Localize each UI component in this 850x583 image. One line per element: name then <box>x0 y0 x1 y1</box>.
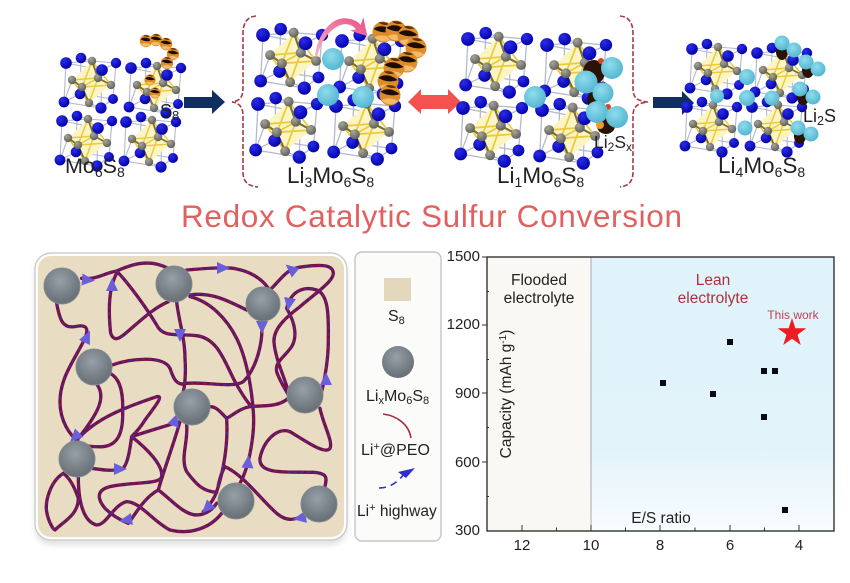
y axis numbers: 1500 <box>447 248 480 265</box>
panel: Li4Mo6S8 crystal: 8 <box>797 164 805 180</box>
legend: S8 label: 8 <box>399 315 405 327</box>
legend: Li+@PEO label: + <box>373 441 380 453</box>
legend: S8 label: S <box>388 308 399 325</box>
polymer chains with Li+ highway <box>46 263 333 532</box>
panel: Li3Mo6S8 crystal: Li <box>287 163 305 188</box>
panel: Li3Mo6S8 crystal: S <box>351 163 366 188</box>
panel: Mo6S8 crystal with S8: S <box>160 101 172 121</box>
panel: Li4Mo6S8 crystal: Li <box>718 153 736 178</box>
panel: Li4Mo6S8 crystal: 6 <box>775 164 783 180</box>
panel: legend <box>355 252 441 541</box>
x axis numbers: 10 <box>583 537 599 554</box>
flooded label: Flooded <box>511 272 567 289</box>
title: Redox Catalytic Sulfur Conversion <box>181 198 682 234</box>
panel: Li1Mo6S8 crystal: Mo <box>522 163 554 188</box>
panel: Li4Mo6S8 crystal <box>680 36 836 180</box>
legend: PEO chain <box>383 414 411 438</box>
x axis title: E/S ratio <box>631 510 691 527</box>
panel: Mo6S8 crystal with S8: 8 <box>172 108 179 123</box>
lean label: electrolyte <box>678 290 748 307</box>
y axis numbers: 900 <box>455 385 480 402</box>
legend: Li+ highway label: highway <box>376 503 437 520</box>
legend: LixMo6S8 label: Li <box>366 388 378 405</box>
legend: LixMo6S8 label: Mo <box>384 388 406 405</box>
legend: S8 swatch <box>384 278 411 301</box>
x axis numbers: 12 <box>514 537 530 554</box>
panel: Mo6S8 crystal with S8: Mo <box>65 154 95 178</box>
y axis title: ) <box>498 330 515 335</box>
panel: Li4Mo6S8 crystal: S <box>824 106 836 126</box>
panel: Li1Mo6S8 crystal: S <box>614 132 626 152</box>
panel: Li1Mo6S8 crystal: Li <box>594 132 608 152</box>
bracket: left <box>232 16 258 187</box>
legend: LixMo6S8 particle <box>382 346 414 378</box>
Li+ direction arrowheads <box>66 260 332 527</box>
panel: Mo6S8 crystal with S8: 8 <box>117 164 125 180</box>
legend: LixMo6S8 label: 6 <box>406 395 412 407</box>
panel: Li3Mo6S8 crystal: Mo <box>312 163 344 188</box>
lean label: Lean <box>696 272 730 289</box>
y axis title: Capacity (mAh g <box>498 344 515 458</box>
panel: Li1Mo6S8 crystal: Li <box>497 163 515 188</box>
panel: Li4Mo6S8 crystal: Mo <box>743 153 775 178</box>
y axis numbers <box>447 248 480 539</box>
y axis numbers: 600 <box>455 454 480 471</box>
arrow: to discharge bracket <box>184 90 225 114</box>
panel: Li1Mo6S8 crystal: 8 <box>576 174 584 190</box>
panel: Li4Mo6S8 crystal: S <box>782 153 797 178</box>
panel: Li4Mo6S8 crystal: 2 <box>817 114 824 128</box>
legend: LixMo6S8 label: 8 <box>423 395 429 407</box>
panel: Li1Mo6S8 crystal <box>454 27 632 190</box>
panel: Mo6S8 crystal with S8 <box>55 34 186 180</box>
arrow: to final product <box>653 91 694 115</box>
legend: highway arrow <box>379 468 415 488</box>
panel: Li1Mo6S8 crystal: x <box>626 140 632 154</box>
flooded label: electrolyte <box>504 290 574 307</box>
legend: Li+ highway label: Li <box>357 503 369 520</box>
panel: Li3Mo6S8 crystal: 8 <box>366 174 374 190</box>
panel: Li3Mo6S8 crystal <box>249 17 426 190</box>
data points <box>660 339 788 513</box>
panel: Li3Mo6S8 crystal: 3 <box>305 174 313 190</box>
y axis numbers: 300 <box>455 522 480 539</box>
panel: Li1Mo6S8 crystal: 6 <box>554 174 562 190</box>
chart: capacity vs E/S ratio <box>447 248 834 554</box>
y axis numbers: 1200 <box>447 316 480 333</box>
legend: LixMo6S8 label: S <box>412 388 423 405</box>
legend: Li+ highway label: + <box>369 502 376 514</box>
x axis numbers <box>514 537 803 554</box>
star: this work <box>778 318 806 345</box>
legend: Li+@PEO label: Li <box>361 442 373 459</box>
panel: polymer network schematic <box>35 253 347 545</box>
panel: Li1Mo6S8 crystal: 1 <box>515 174 523 190</box>
legend: LixMo6S8 label: x <box>378 395 384 407</box>
x axis numbers: 8 <box>656 537 664 554</box>
arrow: red double arrow <box>408 89 461 114</box>
panel: Li1Mo6S8 crystal: 2 <box>608 140 615 154</box>
x axis numbers: 6 <box>726 537 734 554</box>
LixMo6S8 particles <box>44 266 337 522</box>
legend: Li+@PEO label: @PEO <box>380 442 430 459</box>
panel: Li3Mo6S8 crystal: 6 <box>344 174 352 190</box>
this work label: This work <box>767 308 820 322</box>
panel: Mo6S8 crystal with S8: S <box>103 154 117 178</box>
bracket: right <box>620 16 648 187</box>
panel: Mo6S8 crystal with S8: 6 <box>95 164 103 180</box>
y axis title: -1 <box>498 334 509 344</box>
panel: Li1Mo6S8 crystal: S <box>561 163 576 188</box>
panel: Li4Mo6S8 crystal: Li <box>803 106 817 126</box>
x axis numbers: 4 <box>795 537 803 554</box>
panel: Li4Mo6S8 crystal: 4 <box>736 164 744 180</box>
